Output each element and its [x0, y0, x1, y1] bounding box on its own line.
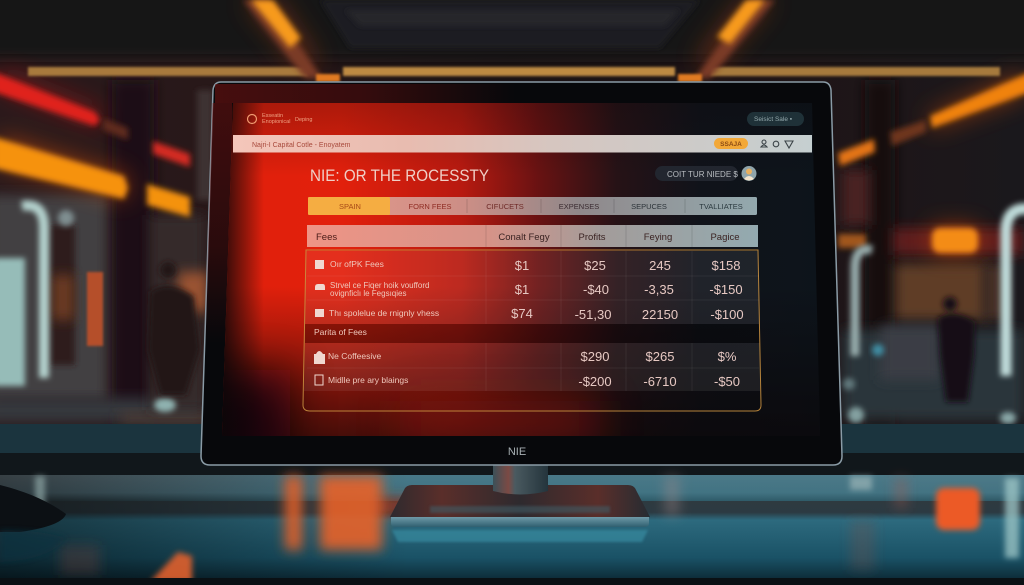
brand text: Enopionical [262, 119, 290, 125]
row labels: Midlle pre ary blaings [328, 375, 408, 385]
ceiling and wall light strips [0, 0, 1024, 254]
tabs: FORN FEES [409, 202, 451, 211]
brand text: Deping [295, 117, 312, 123]
row values: $158 [712, 258, 740, 273]
row values: -51,30 [575, 307, 611, 322]
silhouettes [148, 262, 975, 402]
row values: $74 [511, 306, 533, 321]
breadcrumb bar: SSAJA [720, 141, 742, 148]
row labels: Ne Coffeesive [328, 351, 382, 361]
screen [222, 103, 818, 436]
row icons [314, 260, 325, 385]
row labels: ovignficlı le Fegsıqies [330, 289, 406, 298]
table header [307, 225, 758, 247]
neck [493, 465, 548, 494]
row values: -$50 [714, 374, 740, 389]
desk reflections [60, 476, 907, 575]
row values: $265 [646, 349, 674, 364]
user control [655, 166, 756, 181]
row values: $1 [515, 282, 529, 297]
brand text [262, 113, 312, 125]
avatar [742, 166, 756, 181]
brand text: Esseatin [262, 113, 283, 119]
left far window [150, 215, 205, 410]
brand: NIE [508, 446, 526, 458]
monitor stand [390, 465, 650, 542]
tabs: EXPENSES [559, 202, 599, 211]
table header: Conalt Fegy [498, 232, 550, 243]
tabs: CIFUCETS [486, 202, 524, 211]
table header: Profits [579, 232, 606, 243]
row labels: Parita of Fees [314, 327, 367, 337]
mouse [0, 485, 66, 562]
tabs [308, 197, 757, 215]
row values: -6710 [643, 374, 677, 389]
row labels: Oır ofPK Fees [330, 259, 384, 269]
tabs: SEPUCES [631, 202, 667, 211]
row labels [314, 259, 439, 385]
white light tubes [22, 205, 1024, 378]
row values [511, 258, 744, 389]
row values: -$100 [710, 307, 744, 322]
base [390, 485, 650, 517]
left window [0, 195, 107, 400]
desk [0, 424, 1024, 585]
search pill [747, 112, 804, 126]
badge [714, 138, 748, 149]
monitor [170, 82, 842, 470]
row labels: Thı spolelue de rnignly vhess [329, 308, 439, 318]
row values: -3,35 [644, 282, 674, 297]
row values: 245 [649, 258, 671, 273]
frame [303, 250, 761, 411]
breadcrumb text: Najri-I Capital Cotle - Enoyatem [252, 142, 351, 149]
tabs: SPAIN [339, 202, 361, 211]
top app bar [248, 112, 804, 126]
row values: -$40 [583, 282, 609, 297]
top app bar: Seisict Sale ▪ [754, 116, 792, 123]
table header: Fees [316, 232, 337, 243]
breadcrumb bar [233, 135, 812, 152]
rows background [305, 251, 759, 324]
table header: Pagice [710, 232, 740, 243]
table header: Feying [644, 232, 672, 243]
row values: -$150 [709, 282, 743, 297]
row labels: Strvel ce Fiqer hoik voufford [330, 281, 429, 290]
row values: $290 [581, 349, 609, 364]
row values: 22150 [642, 307, 678, 322]
page title: NIE: OR THE ROCESSTY [310, 167, 489, 185]
user control: COIT TUR NIEDE $ [667, 170, 738, 179]
fee table [303, 250, 761, 411]
logo [248, 114, 256, 124]
bezel red glow [206, 84, 489, 325]
row values: $% [718, 349, 737, 364]
tabs: TVALLIATES [699, 202, 743, 211]
row values: $25 [584, 258, 606, 273]
toolbar icons [761, 140, 793, 148]
bezel [201, 82, 842, 465]
background: room [0, 0, 1024, 430]
stand reflection [392, 530, 648, 542]
right room [893, 228, 1024, 255]
row values: $1 [515, 258, 529, 273]
row values: -$200 [578, 374, 612, 389]
